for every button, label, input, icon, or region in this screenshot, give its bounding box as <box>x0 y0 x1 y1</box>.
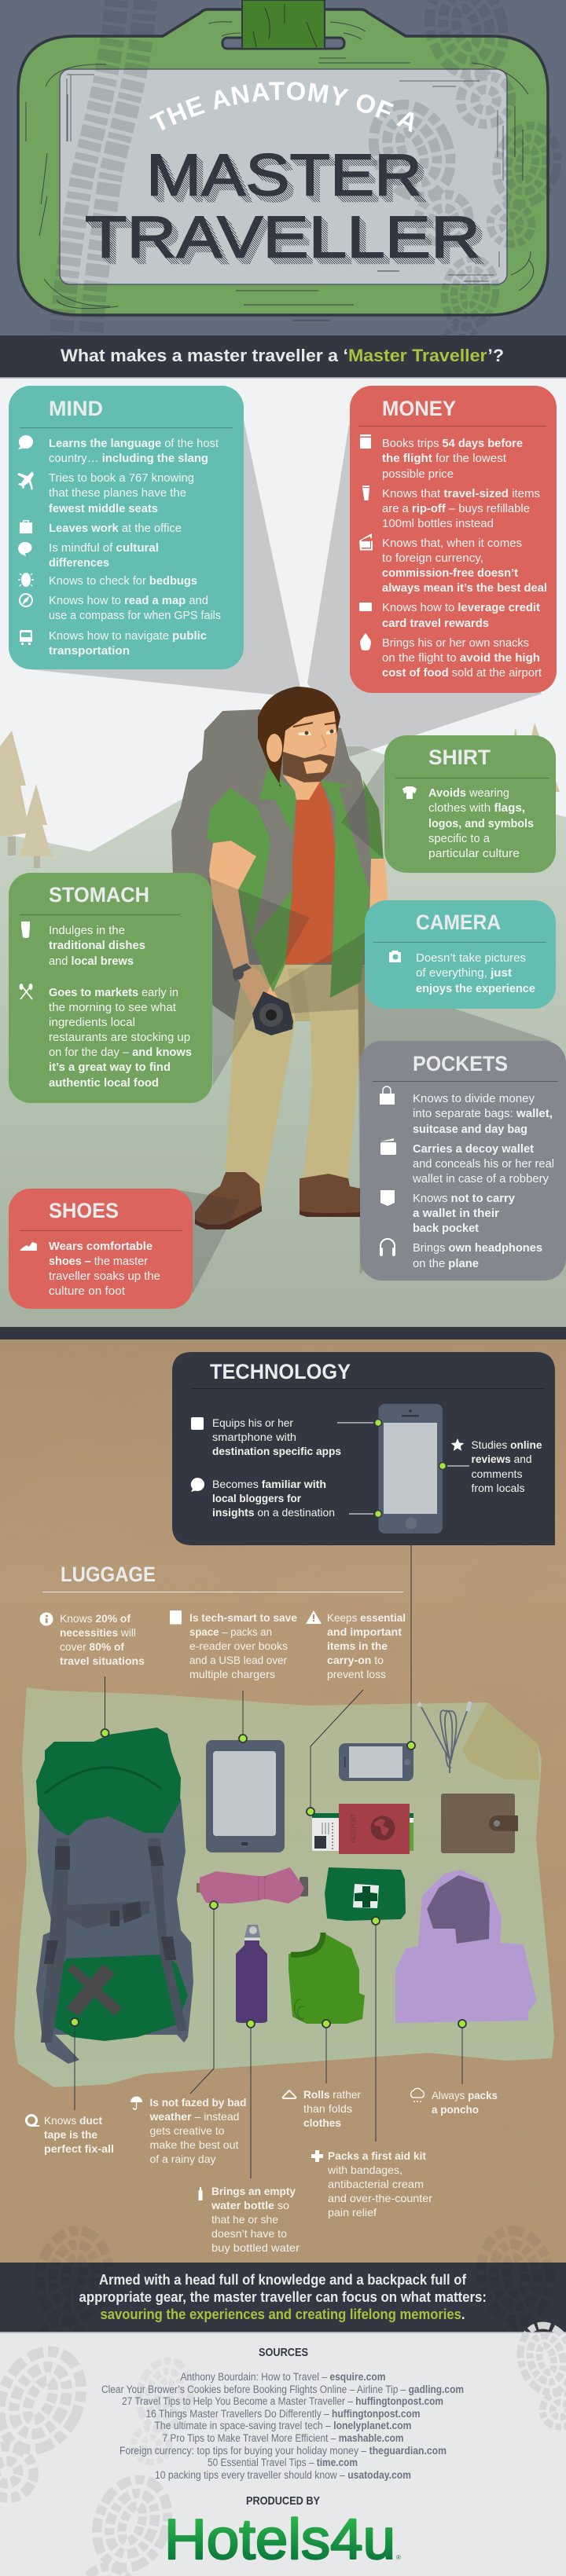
passport label: PASSPORT <box>350 1814 358 1842</box>
technology icons <box>191 1417 464 1492</box>
luggage tip: poncho: Always packs <box>432 2089 498 2101</box>
backpack body <box>36 1799 193 2064</box>
icon: camera <box>389 951 401 962</box>
luggage tip: first aid: and over-the-counter <box>328 2192 432 2204</box>
luggage tip: weather <box>130 2096 247 2165</box>
luggage tip: first aid: antibacterial cream <box>328 2178 424 2190</box>
luggage tip: first aid: with bandages, <box>327 2164 402 2176</box>
stomach text: traditional dishes <box>49 939 145 952</box>
footer background <box>0 2319 566 2576</box>
camera text <box>416 951 535 995</box>
mind text: differences <box>49 556 109 570</box>
connector dots <box>71 1729 466 2028</box>
folded corner <box>462 1703 539 1780</box>
technology text: Studies online <box>472 1438 542 1451</box>
item: backpack <box>36 1728 193 2064</box>
sources list: 16 Things Master Travellers Do Differently – huffingtonpost.com <box>146 2408 420 2420</box>
kraft paper background <box>0 1339 566 2263</box>
money icons <box>359 434 373 650</box>
mind text: transportation <box>49 644 130 658</box>
money text: Brings his or her own snacks <box>382 636 529 650</box>
luggage tip: first aid <box>311 2149 432 2219</box>
item: phone <box>339 1743 413 1781</box>
pockets text: Knows not to carry <box>413 1192 516 1205</box>
money text: to foreign currency, <box>382 551 483 565</box>
shirt <box>207 768 384 998</box>
luggage tip: tech-smart: multiple chargers <box>189 1668 275 1680</box>
technology text: local bloggers for <box>212 1492 302 1504</box>
mind text: Knows how to navigate public <box>49 629 207 643</box>
panel: technology <box>172 1352 555 1545</box>
shirt text: Avoids wearing <box>428 786 509 800</box>
camera text: enjoys the experience <box>416 982 535 995</box>
heading: technology: TECHNOLOGY <box>210 1360 351 1383</box>
technology text: insights on a destination <box>212 1506 335 1519</box>
luggage tip: weather: make the best out <box>149 2138 239 2151</box>
pockets text: a wallet in their <box>413 1207 499 1220</box>
pockets text <box>412 1092 554 1270</box>
money text <box>382 437 547 680</box>
technology text: smartphone with <box>212 1431 296 1443</box>
trees <box>0 723 560 868</box>
stomach text: it’s a great way to find <box>49 1061 171 1074</box>
mind text: fewest middle seats <box>49 502 158 515</box>
shoes <box>195 1172 361 1229</box>
luggage connectors <box>75 1545 462 2178</box>
luggage tip: carry-on: carry-on to <box>327 1654 384 1666</box>
heading: shoes: SHOES <box>49 1199 119 1222</box>
item: rolled clothes <box>289 1933 365 2024</box>
panel: camera <box>365 900 556 1009</box>
luggage tip: water bottle: water bottle so <box>211 2199 289 2211</box>
luggage tip: duct tape: tape is the <box>44 2128 97 2141</box>
title main <box>85 141 480 270</box>
stomach text: ingredients local <box>49 1016 135 1029</box>
decorative tyre track and boot prints <box>61 0 566 365</box>
t-shirt <box>285 780 336 965</box>
luggage tip: poncho <box>411 2088 498 2116</box>
luggage tip: necessities: cover 80% of <box>60 1640 124 1653</box>
panel: shoes <box>9 1189 193 1309</box>
luggage tip: water bottle <box>198 2185 300 2254</box>
luggage tip: duct tape: Knows duct <box>44 2114 102 2127</box>
phone callout lines <box>337 1419 469 1518</box>
item: charging cable <box>418 1702 470 1773</box>
panel: money <box>350 386 557 693</box>
stomach text: and local brews <box>49 955 134 968</box>
hair <box>258 687 340 787</box>
money text: 100ml bottles instead <box>382 517 494 530</box>
luggage tip: rolls: clothes <box>303 2116 341 2129</box>
watch <box>233 963 252 982</box>
badge body <box>18 9 548 315</box>
ear <box>266 734 282 762</box>
camera <box>252 991 293 1035</box>
mouth <box>303 760 328 774</box>
mind text: Leaves work at the office <box>49 522 182 535</box>
icon: umbrella <box>130 2097 142 2109</box>
icon: warning <box>306 1610 322 1624</box>
stomach text: Indulges in the <box>49 924 125 937</box>
luggage tip: carry-on: Keeps essential <box>327 1611 406 1624</box>
produced by heading: PRODUCED BY <box>246 2494 320 2508</box>
panel: shirt <box>384 735 556 873</box>
luggage tip: weather: Is not fazed by bad <box>149 2096 247 2109</box>
money text: card travel rewards <box>382 617 489 630</box>
luggage tip: water bottle: buy bottled water <box>211 2241 300 2254</box>
technology text <box>212 1416 542 1519</box>
money text: are a rip-off – buys refillable <box>382 502 530 515</box>
item: first aid kit <box>325 1867 406 1921</box>
luggage tip: first aid: Packs a first aid kit <box>328 2149 426 2162</box>
icon: tape <box>27 2115 39 2127</box>
buckles <box>44 1846 176 2007</box>
conclusion text: Armed with a head full of knowledge and a backpack full of <box>99 2272 467 2288</box>
conclusion band <box>0 2225 566 2373</box>
beard <box>283 752 335 782</box>
stomach text <box>49 924 192 1090</box>
pockets text: Knows to divide money <box>413 1092 535 1105</box>
sources list: 27 Travel Tips to Help You Become a Master Traveller – huffingtonpost.com <box>122 2395 443 2407</box>
heading: pockets: POCKETS <box>413 1052 508 1075</box>
globe <box>371 1816 395 1840</box>
pockets text: on the plane <box>413 1257 479 1270</box>
camera card <box>365 900 556 1009</box>
eyes <box>298 730 336 735</box>
item: wallet <box>441 1794 518 1853</box>
technology text: comments <box>472 1468 522 1480</box>
stomach text: on for the day – and knows <box>49 1046 192 1059</box>
mind text: use a compass for when GPS fails <box>49 609 221 622</box>
money text: Books trips 54 days before <box>382 437 523 450</box>
luggage tip: carry-on: and important <box>327 1625 402 1638</box>
logo: Hotels4u <box>164 2508 395 2571</box>
pockets text: suitcase and day bag <box>413 1123 527 1136</box>
luggage tip: water bottle: that he or she <box>211 2213 278 2226</box>
money card <box>350 386 557 693</box>
backpack <box>171 709 380 1021</box>
item: tablet <box>206 1740 285 1852</box>
heading: camera: CAMERA <box>416 911 501 934</box>
sources list: Foreign currency: top tips for buying your holiday money – theguardian.com <box>119 2445 447 2457</box>
luggage tip: duct tape: perfect fix-all <box>44 2142 114 2155</box>
camera text: Doesn’t take pictures <box>416 951 526 965</box>
face <box>283 711 337 782</box>
icon: plus <box>311 2150 323 2162</box>
luggage tip: necessities: necessities will <box>60 1626 136 1639</box>
technology text: destination specific apps <box>212 1445 341 1457</box>
sources list <box>101 2371 464 2481</box>
pockets icons <box>380 1086 396 1256</box>
header background <box>0 0 566 336</box>
luggage tip: tech-smart: e-reader over books <box>189 1640 288 1652</box>
backpack straps <box>252 800 292 940</box>
pockets text: wallet in case of a robbery <box>412 1172 549 1185</box>
conclusion text: savouring the experiences and creating lifelong memories. <box>101 2307 465 2322</box>
money text: the flight for the lowest <box>382 452 507 465</box>
panel: stomach <box>9 873 212 1103</box>
icon: book <box>170 1610 182 1625</box>
sources heading: SOURCES <box>259 2346 308 2359</box>
sources list: 7 Pro Tips to Make Travel More Efficient – mashable.com <box>162 2432 404 2444</box>
mind card <box>9 386 244 669</box>
technology text: Becomes familiar with <box>212 1478 326 1490</box>
luggage tip: rolls <box>283 2088 361 2129</box>
sources <box>101 2346 464 2481</box>
luggage tip: rolls: Rolls rather <box>303 2088 361 2101</box>
stomach text: restaurants are stocking up <box>49 1031 190 1044</box>
pockets card <box>360 1041 566 1281</box>
shirt card <box>384 735 556 873</box>
stomach icons <box>19 922 33 999</box>
money callout shadow cone <box>307 424 542 757</box>
producer <box>164 2494 401 2571</box>
left arm <box>209 841 277 1013</box>
money text: on the flight to avoid the high <box>382 651 540 665</box>
heading: mind: MIND <box>49 397 103 420</box>
panel: luggage mat <box>14 1687 554 2087</box>
luggage tip: necessities: travel situations <box>60 1654 145 1667</box>
sources list: 50 Essential Travel Tips – time.com <box>208 2457 358 2468</box>
sources list: The ultimate in space-saving travel tech – lonelyplanet.com <box>154 2420 412 2431</box>
luggage tip: carry-on <box>306 1610 406 1680</box>
money text: always mean it’s the best deal <box>382 581 547 595</box>
map mat <box>14 1687 554 2087</box>
mind text: Learns the language of the host <box>49 437 219 450</box>
icon: rain cloud <box>411 2088 424 2102</box>
mind text: Is mindful of cultural <box>49 541 159 555</box>
mind icons <box>17 435 34 645</box>
mind text <box>49 437 221 658</box>
heading: luggage: LUGGAGE <box>61 1563 156 1586</box>
luggage tip: water bottle: Brings an empty <box>211 2185 296 2197</box>
stomach card <box>9 873 212 1103</box>
straps <box>41 1838 187 2043</box>
smartphone <box>379 1404 443 1534</box>
sources list: Anthony Bourdain: How to Travel – esquire.com <box>181 2371 385 2383</box>
technology text: reviews and <box>472 1453 531 1465</box>
money text: Knows that, when it comes <box>382 537 522 550</box>
luggage tip: weather: weather – instead <box>149 2110 239 2123</box>
item: passport <box>339 1804 410 1854</box>
shoes text: shoes – the master <box>49 1255 148 1268</box>
hills <box>0 746 566 1328</box>
title <box>85 82 484 270</box>
id badge <box>18 0 548 321</box>
shirt text: clothes with flags, <box>428 801 525 815</box>
luggage tip: carry-on: items in the <box>327 1640 388 1652</box>
luggage tip: tech-smart: Is tech-smart to save <box>189 1611 297 1624</box>
luggage tip: tech-smart: and a USB lead over <box>189 1654 287 1666</box>
subtitle band <box>0 335 566 377</box>
shirt text: particular culture <box>428 847 520 860</box>
item: poncho <box>395 1870 537 2023</box>
technology card <box>172 1352 555 1545</box>
luggage tip: tech-smart: space – packs an <box>189 1625 272 1638</box>
mind text: Tries to book a 767 knowing <box>49 471 194 485</box>
shoes card <box>9 1189 193 1309</box>
luggage tip: duct tape <box>27 2114 114 2155</box>
title arc: the anatomy of a: THE ANATOMY OF A <box>149 82 413 132</box>
luggage tip: poncho: a poncho <box>432 2103 479 2116</box>
luggage tip: first aid: pain relief <box>328 2206 377 2219</box>
icon: shoe <box>20 1242 37 1251</box>
luggage tip: water bottle: doesn’t have to <box>211 2227 287 2240</box>
technology text: from locals <box>472 1482 525 1494</box>
callout shadow cones <box>29 416 552 1294</box>
divider band <box>0 1327 566 1339</box>
neck <box>283 775 320 800</box>
pockets text: back pocket <box>413 1222 479 1235</box>
mind text: Knows how to read a map and <box>49 594 208 607</box>
money text: Knows that travel-sized items <box>382 487 540 500</box>
heading: shirt: SHIRT <box>428 746 491 769</box>
shirt text: specific to a <box>428 832 491 845</box>
mind text: country… including the slang <box>49 452 208 465</box>
bottom pocket <box>43 1955 188 2041</box>
shirt text: logos, and symbols <box>428 817 534 830</box>
panel: mind <box>9 386 244 669</box>
luggage tip: necessities <box>39 1612 145 1667</box>
icon: bottle <box>198 2187 203 2200</box>
icon: hanger <box>283 2090 296 2098</box>
icon: info <box>39 1612 53 1626</box>
money text: commission-free doesn’t <box>382 566 518 580</box>
pants <box>226 965 365 1200</box>
item: boarding pass <box>312 1813 413 1851</box>
icon: t-shirt <box>402 786 417 799</box>
badge window <box>60 69 507 284</box>
conclusion text: appropriate gear, the master traveller can focus on what matters: <box>79 2289 487 2305</box>
mind text: Knows to check for bedbugs <box>49 574 197 588</box>
luggage tip: weather: gets creative to <box>149 2124 225 2137</box>
pockets text: Brings own headphones <box>413 1241 542 1255</box>
shoes text: culture on foot <box>49 1284 126 1298</box>
subtitle: What makes a master traveller a ‘ Master Traveller ’? <box>61 346 504 365</box>
money text: cost of food sold at the airport <box>382 666 542 680</box>
pockets text: into separate bags: wallet, <box>413 1107 553 1120</box>
panel: pockets <box>360 1041 566 1281</box>
lanyard strap <box>242 0 325 49</box>
top lid <box>36 1728 181 1836</box>
mind text: that these planes have the <box>49 486 186 500</box>
pockets text: Carries a decoy wallet <box>413 1142 534 1156</box>
technology text: Equips his or her <box>212 1416 293 1429</box>
head <box>258 687 340 800</box>
shirt text <box>428 786 534 860</box>
sources list: 10 packing tips every traveller should know – usatoday.com <box>155 2469 411 2481</box>
logo: ® <box>396 2554 401 2561</box>
shoes text: Wears comfortable <box>49 1240 153 1253</box>
traveller illustration <box>171 687 390 1229</box>
luggage tip: weather: of a rainy day <box>149 2153 215 2165</box>
luggage tip: carry-on: prevent loss <box>327 1668 386 1680</box>
shoes text <box>49 1240 160 1298</box>
money text: Knows how to leverage credit <box>382 601 540 614</box>
heading: money: MONEY <box>382 397 456 420</box>
camera text: of everything, just <box>416 966 512 980</box>
badge slot <box>222 38 344 49</box>
money text: possible price <box>382 467 454 481</box>
luggage tip: rolls: than folds <box>303 2102 352 2115</box>
stomach text: authentic local food <box>49 1076 159 1090</box>
luggage tip: necessities: Knows 20% of <box>60 1612 130 1625</box>
item: rolled towel <box>197 1867 308 1904</box>
right arm <box>368 859 390 974</box>
heading: stomach: STOMACH <box>49 883 149 907</box>
sources list: Clear Your Brower’s Cookies before Booking Flights Online – Airline Tip – gadling.com <box>101 2384 464 2395</box>
stomach text: the morning to see what <box>49 1001 177 1014</box>
conclusion text <box>79 2272 487 2322</box>
luggage tip: tech-smart <box>170 1610 297 1680</box>
pockets text: and conceals his or her real <box>413 1157 554 1171</box>
anatomy scene background <box>0 377 566 1328</box>
item: water bottle <box>236 1925 267 2023</box>
title main: MASTER <box>146 141 422 207</box>
duct tape <box>66 1964 122 2016</box>
title main: TRAVELLER <box>85 204 480 270</box>
shoes text: traveller soaks up the <box>49 1270 160 1283</box>
stomach text: Goes to markets early in <box>49 986 178 999</box>
